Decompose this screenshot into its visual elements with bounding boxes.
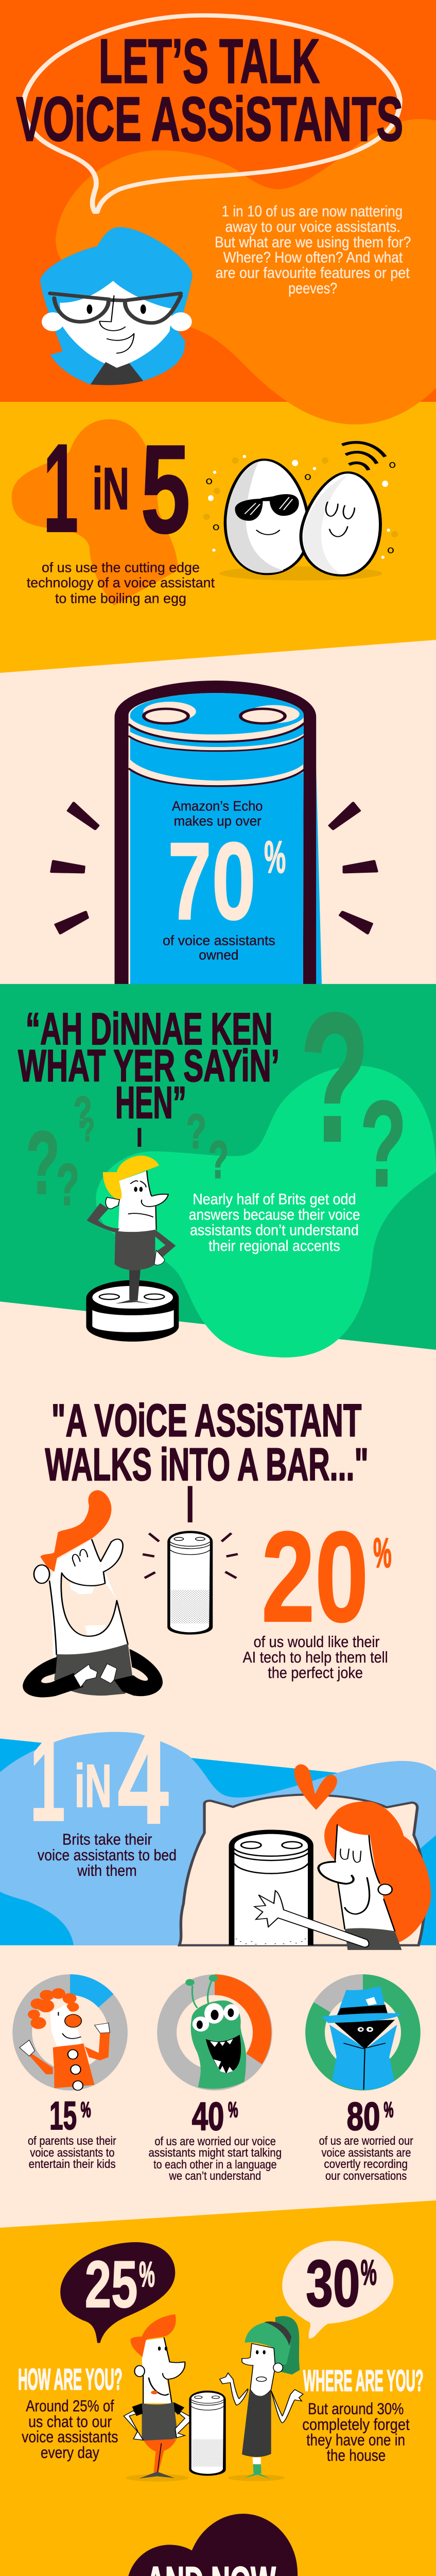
icon: sound rays [51,803,377,934]
stat: 1 in 5: 1 [43,418,78,558]
panel: joke [23,1395,392,1697]
character: puzzled man on speaker [86,1156,179,1342]
text: daily chat: voice assistants [22,2429,118,2446]
illustration: pillow [179,1794,425,1945]
description: assistants don’t understand [190,1222,359,1239]
caption: 80%: 80 [347,2094,380,2139]
donut: 80% spy [305,1974,421,2091]
background blob [56,119,436,371]
description [27,560,215,606]
panel: 1 in 4 bed [0,1707,436,1950]
description [189,1190,360,1254]
blue background [0,1739,436,1945]
text: daily chat: us chat to our [28,2413,112,2431]
speech bubble: 30% [282,2241,393,2338]
speech bubble: 25% [60,2242,175,2343]
background blob [12,419,178,605]
icon: sound rays [143,1533,238,1578]
stat: 1 in 5 [43,418,190,560]
icon: two eggs [203,443,398,581]
panel: regional accents [0,975,436,1358]
stat: 70%: of voice assistants [163,933,275,948]
caption: 40% [148,2094,282,2182]
icon: heart [294,1765,337,1810]
stat: 20%: 20 [261,1505,369,1649]
text: daily chat: Around 25% of [26,2397,114,2415]
heading: HEN” [115,1078,186,1128]
speech line [137,1128,141,1147]
character: woman hugging speaker [254,1802,431,1950]
panel: Amazon Echo 70% [51,681,377,984]
caption: 40%: we can’t understand [169,2169,261,2182]
stat: 70%: owned [199,947,238,962]
description: their regional accents [208,1237,340,1254]
description: to time boiling an egg [55,590,186,606]
character: woman [220,2316,303,2479]
character: spy [322,1986,402,2090]
caption: 15%: entertain their kids [29,2157,116,2171]
description [243,1634,388,1682]
decorative question marks: ? [208,1130,229,1190]
caption: 40%: 40 [192,2094,224,2139]
background blob [96,1066,436,1358]
caption: 80%: % [383,2098,393,2122]
stat: 1 in 5: iN [92,455,129,521]
description: Brits take their [62,1831,152,1848]
panel: how are you / where are you: HOW ARE YOU? [18,2364,123,2396]
text: daily chat [22,2397,118,2462]
speech bubble: 25%: 25 [85,2247,137,2321]
panel: hero [16,15,436,425]
caption: 40%: % [228,2098,238,2122]
speech bubble: 25%: % [139,2255,155,2294]
text: forgetting [302,2400,410,2465]
description: voice assistants to bed [38,1846,177,1864]
caption: 15%: voice assistants to [30,2146,115,2159]
background blob [0,1732,436,1945]
green background [0,984,436,1350]
caption: 40%: to each other in a language [153,2158,276,2171]
caption: 15% [28,2093,116,2171]
description: with them [77,1861,137,1879]
stat: 1 in 4: iN [75,1752,112,1820]
icon: echo speaker [115,681,322,984]
text: forgetting: the house [327,2447,386,2465]
description: of us would like their [254,1634,379,1651]
cloud with heading [76,2514,343,2576]
caption: 15%: 15 [49,2093,77,2138]
stat: 70%: makes up over [174,813,261,828]
decorative question marks: ? [57,1151,79,1217]
decorative question marks: ? [186,1105,206,1159]
speech bubble: 30%: % [361,2252,377,2292]
description: the perfect joke [268,1665,363,1682]
description: answers because their voice [189,1206,360,1223]
stat: 1 in 5: 5 [141,419,190,560]
decorative question marks: ? [26,1113,60,1212]
panel: how are you / where are you [18,2314,424,2576]
caption: 40%: assistants might start talking [148,2146,282,2159]
character: man [124,2314,193,2479]
caption: 15%: of parents use their [28,2134,116,2147]
title [16,27,403,155]
shadows [126,2474,285,2482]
decorative question marks: ? [74,1088,92,1137]
speech bubble outline [23,15,400,212]
panel: 1 in 5 eggs [12,418,398,606]
decorative question marks [26,975,407,1217]
heading [18,1005,280,1128]
caption: 80% [319,2094,413,2182]
character: laughing man [23,1490,163,1697]
description: technology of a voice assistant [27,575,215,590]
icon: echo speaker [189,2391,226,2476]
speech bubble: 30%: 30 [306,2246,360,2320]
intro text [215,203,411,297]
speech line [188,1486,193,1522]
icon: echo speaker [167,1531,213,1635]
illustration: echo speaker [229,1829,313,1945]
description: of us use the cutting edge [42,560,200,575]
stat: 1 in 4 [30,1707,169,1851]
caption: 15%: % [81,2098,91,2122]
panel: three statistics [12,1974,421,2091]
description: Nearly half of Brits get odd [193,1190,356,1208]
panel: Amazon Echo 70%: % [264,832,286,883]
text: daily chat: every day [41,2444,99,2462]
stat: 70% [163,798,286,962]
character: clown [20,1988,110,2090]
decorative question marks: ? [81,1111,95,1148]
heading [45,1395,369,1490]
stat: 70%: 70 [168,819,256,943]
character: woman with glasses [40,227,193,385]
stat: 1 in 4: 4 [117,1707,169,1851]
donut: 15% clown [12,1974,128,2091]
donut: 40% alien [157,1974,272,2091]
character: alien [185,1975,246,2089]
text: % [373,1530,392,1576]
panel: statistic captions [28,2093,413,2343]
description: AI tech to help them tell [243,1649,388,1666]
description [38,1831,177,1879]
stat: 1 in 4: 1 [30,1714,65,1846]
caption: 40%: of us are worried our voice [154,2135,276,2148]
blob overlapping yellow band [250,371,436,425]
intro text: peeves? [288,280,337,297]
decorative question marks: ? [300,975,370,1180]
stat: 70%: Amazon’s Echo [172,798,263,814]
